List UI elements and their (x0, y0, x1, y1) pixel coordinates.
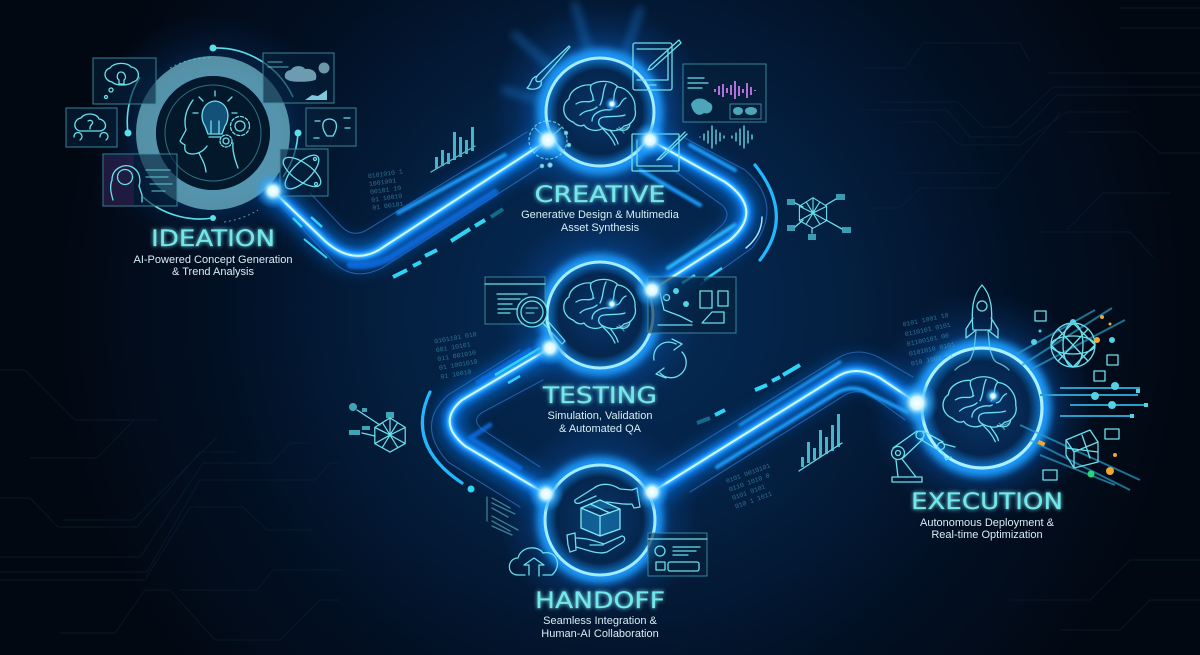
execution ring (920, 346, 1044, 470)
panel: code window (485, 277, 545, 324)
text: execution description (920, 517, 1055, 541)
binary: ideation: 1001001 (369, 177, 397, 188)
binary: handoff: 0101 0010101 (725, 462, 771, 485)
panel: question cloud (66, 108, 117, 147)
binary: ideation: 0101010 1 (368, 168, 403, 180)
panel: cloud chart (263, 53, 334, 103)
diagram: globe data stream (1015, 308, 1125, 381)
handoff ring (543, 463, 657, 577)
text: ideation description: & Trend Analysis (172, 266, 254, 278)
diagram: data cube (787, 194, 851, 240)
binary: execution: 0101 1001 10 (902, 312, 949, 328)
connector second strand (350, 145, 907, 468)
binary: execution: 0101010 0101 (908, 341, 956, 358)
icon: paintbrush (527, 46, 570, 89)
icon: hands with box (567, 484, 640, 553)
binary: ideation: 00101 10 (370, 185, 402, 196)
text: execution description: Real-time Optimization (931, 529, 1043, 541)
binary: execution (902, 312, 958, 368)
text: creative description: Asset Synthesis (561, 222, 640, 234)
connector main strand glow (273, 140, 917, 494)
chart: execution bars (799, 414, 842, 471)
panel: brain head (103, 154, 177, 206)
binary: testing: 01 1001010 (438, 358, 478, 372)
panel: simulation (648, 277, 736, 333)
text: handoff description: Human-AI Collaboration (541, 628, 659, 640)
icon: brain (943, 377, 1016, 442)
panel: execution (799, 285, 1148, 541)
icon: brain (564, 81, 635, 145)
text: handoff description: Seamless Integration & (543, 615, 658, 627)
connector main strand core (273, 140, 917, 494)
text: ideation description (134, 254, 292, 278)
binary: execution: 01100101 00 (906, 332, 950, 348)
glow: creative light rays (505, 5, 640, 100)
icon: tablet bottom (632, 132, 687, 171)
side arcs (422, 165, 776, 483)
binary: testing: 01 10010 (440, 368, 472, 381)
panel: handoff (487, 462, 781, 640)
icon: waveform (700, 126, 752, 148)
title: testing: TESTING (542, 384, 657, 409)
binary: ideation (368, 168, 408, 212)
text: testing description (548, 410, 652, 435)
binary: execution: 0110101 0101 (904, 322, 951, 338)
diagram: cube data stream (1020, 425, 1140, 490)
diagram: testing node cube (349, 403, 405, 452)
icon: magnifier (517, 297, 565, 344)
binary: execution: 010 1001 01 (910, 352, 954, 368)
connector: flow path (273, 132, 917, 507)
binary: testing: 011 001010 (437, 349, 477, 363)
text: creative description (521, 209, 680, 234)
connector halo (273, 140, 917, 494)
diagram: data sliders (1040, 382, 1148, 418)
title: handoff: HANDOFF (535, 589, 665, 614)
title: creative: CREATIVE (534, 183, 666, 208)
binary: testing (434, 331, 484, 381)
text: testing description: Simulation, Validation (548, 410, 652, 422)
binary: handoff: 0110 1010 0 (728, 472, 771, 494)
panel: atom (279, 149, 328, 196)
text: ideation description: AI-Powered Concept Generation (134, 254, 292, 266)
text: execution description: Autonomous Deployment & (920, 517, 1055, 529)
icon: brain (564, 279, 635, 343)
text: handoff description (541, 615, 659, 640)
panel: approval window (648, 533, 707, 576)
title: execution: EXECUTION (911, 490, 1063, 515)
testing ring (545, 260, 655, 370)
connector dashes (293, 209, 800, 423)
binary: handoff (725, 462, 781, 510)
chart: ideation bars (431, 127, 475, 172)
panel: idea nodes (306, 108, 356, 146)
binary: testing: 001 10101 (435, 341, 471, 354)
icon: head with bulb and gears (180, 91, 250, 172)
panel: creative media (683, 64, 766, 122)
icon: tablet top (633, 40, 681, 90)
title: ideation: IDEATION (151, 227, 275, 252)
binary: ideation: 01 10010 (371, 193, 403, 204)
icon: cloud upload (509, 548, 557, 576)
ideation ring (124, 44, 302, 222)
panel: creative (521, 40, 851, 240)
text: creative description: Generative Design & Multimedia (521, 209, 680, 221)
binary: testing: 0101101 010 (434, 331, 477, 345)
panel: testing (349, 260, 736, 452)
binary lines: handoff (487, 497, 518, 535)
text: testing description: & Automated QA (559, 423, 642, 435)
creative ring (543, 55, 657, 169)
connector outer thin lines (280, 132, 913, 507)
glow: stage halos (93, 2, 1097, 620)
binary: handoff: 010 1 1011 (734, 490, 773, 510)
icon: rocket (955, 285, 1009, 370)
binary: ideation: 01 00101 (372, 201, 404, 212)
panel: thought bulb (93, 58, 156, 104)
panel: ideation (66, 44, 475, 278)
connector dot (468, 486, 474, 492)
icon: node network (529, 121, 571, 168)
connector main strand band (273, 140, 917, 494)
binary: handoff: 0101 0101 (731, 483, 767, 502)
icon: robot arm (892, 431, 955, 482)
icon: refresh (654, 339, 686, 378)
connector nodes (255, 120, 939, 512)
